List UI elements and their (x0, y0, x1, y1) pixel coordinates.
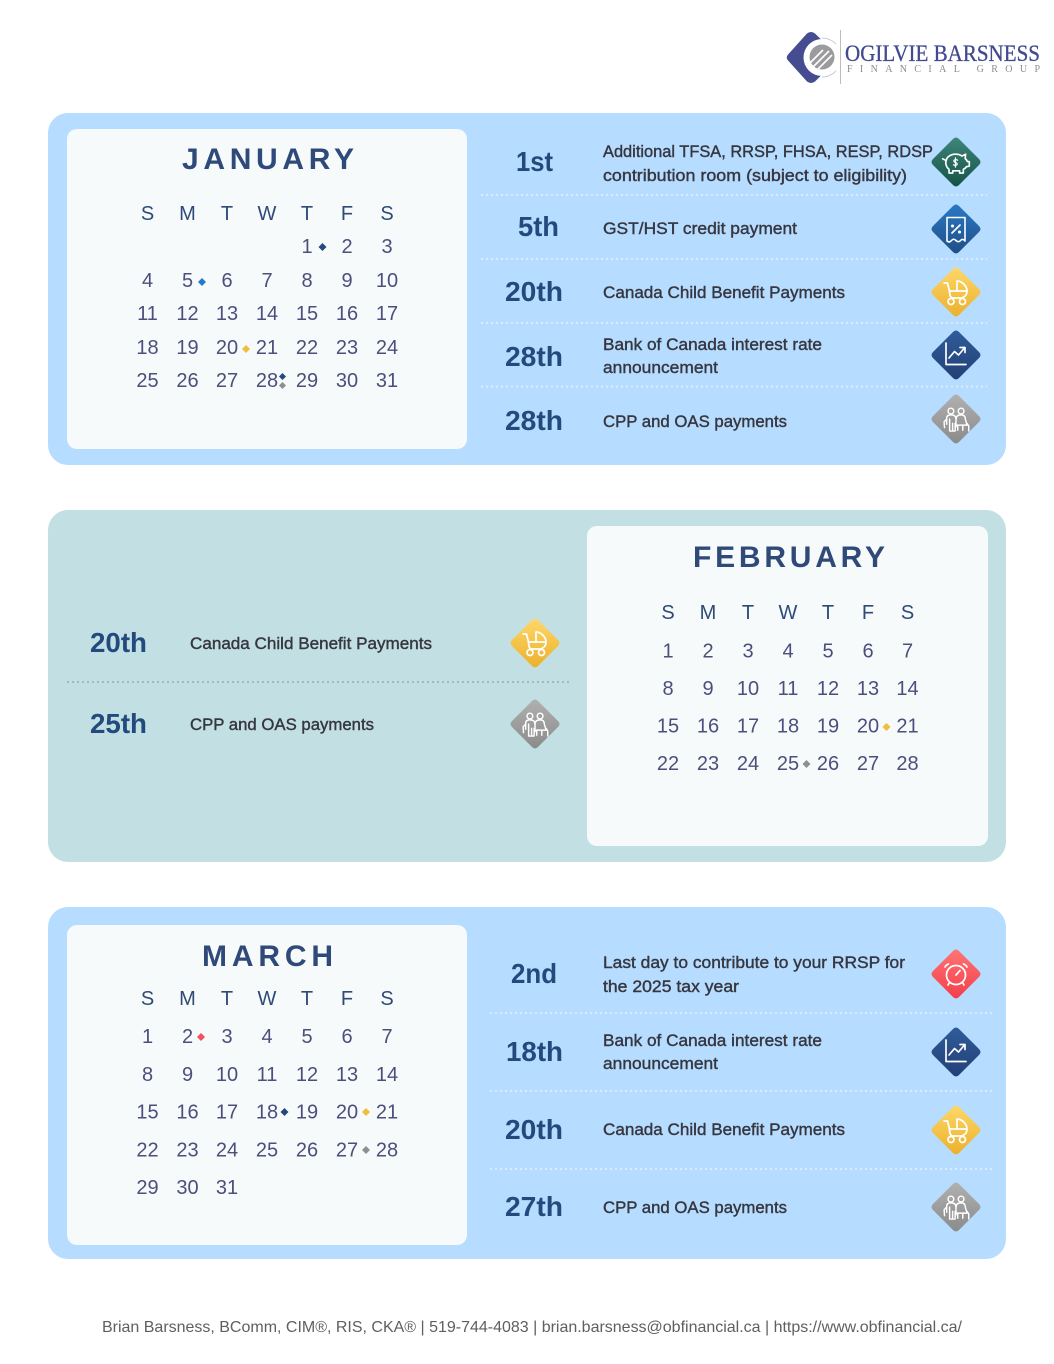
event: 5th: 5th (518, 211, 559, 242)
january dates: 8 (301, 270, 313, 292)
march dates: 21 (376, 1102, 398, 1124)
january dates: 5 (182, 270, 193, 292)
march dates (136, 1026, 398, 1199)
january weekday header (141, 203, 394, 225)
february dates: 12 (817, 678, 839, 700)
january weekday header: W (258, 203, 277, 225)
january dates: 12 (176, 303, 199, 325)
january dates: 1 (301, 236, 313, 258)
heading: february: FEBRUARY (693, 541, 885, 574)
february dates: 9 (702, 678, 714, 700)
march dates: 19 (296, 1102, 318, 1124)
event: february 20th (90, 618, 560, 668)
event: 1st: Additional TFSA, RRSP, FHSA, RESP, RDSP (603, 142, 933, 161)
event: 1st: 1st (516, 146, 553, 177)
january dates: 26 (176, 370, 199, 392)
march dates: 26 (296, 1140, 318, 1162)
march dates: 28 (376, 1140, 398, 1162)
january weekday header: T (221, 203, 233, 225)
march dates: 17 (216, 1102, 238, 1124)
february weekday header: T (742, 602, 754, 624)
event: march 2nd: 2nd (511, 958, 557, 989)
february dates: 2 (702, 640, 714, 662)
event: 5th (518, 204, 980, 254)
march dates: 24 (216, 1140, 238, 1162)
february dates: 8 (662, 678, 674, 700)
event: 28th pension: CPP and OAS payments (603, 412, 787, 431)
january weekday header: T (301, 203, 313, 225)
january dates: 11 (137, 303, 158, 325)
february dates: 6 (862, 640, 874, 662)
january dates: 25 (136, 370, 159, 392)
february calendar card (587, 526, 988, 846)
march dates: 10 (216, 1064, 238, 1086)
event: 28th pension: 28th (505, 405, 563, 436)
february weekday header (661, 602, 914, 624)
january dates: 21 (256, 337, 278, 359)
january dates: 23 (336, 337, 358, 359)
february weekday header: S (661, 602, 675, 624)
icon: seniors (932, 1182, 980, 1232)
february dates: 10 (737, 678, 759, 700)
february dates: 13 (857, 678, 879, 700)
january weekday header: S (141, 203, 154, 225)
january dates: 30 (336, 370, 358, 392)
march weekday header: W (258, 988, 277, 1010)
event: 28th interest rate: announcement (603, 358, 718, 377)
logo: FINANCIAL GROUP (847, 64, 1040, 75)
icon: piggy bank (932, 138, 980, 186)
event: february 20th: 20th (90, 627, 147, 658)
january dates: 27 (216, 370, 238, 392)
january weekday header: F (341, 203, 353, 225)
march dates: 9 (182, 1064, 193, 1086)
january dates: 28 (256, 370, 278, 392)
march dates: 23 (176, 1140, 199, 1162)
february dates: 20 (857, 716, 879, 738)
icon: seniors (932, 394, 980, 444)
march dates: 3 (221, 1026, 233, 1048)
february dates: 1 (662, 640, 674, 662)
january dates: 19 (176, 337, 199, 359)
february dates: 19 (817, 716, 839, 738)
january dates: 16 (336, 303, 358, 325)
february dates: 15 (657, 716, 679, 738)
march dates: 16 (176, 1102, 199, 1124)
event: february 25th (90, 700, 560, 748)
event: march 27th: 27th (505, 1191, 563, 1222)
event: march 18th (506, 1028, 980, 1076)
february dates: 28 (896, 753, 919, 775)
february dates: 18 (777, 716, 799, 738)
event: march 27th (505, 1182, 980, 1232)
january weekday header: S (380, 203, 394, 225)
event: 20th (505, 268, 980, 316)
january dates: 29 (296, 370, 318, 392)
february date markers (802, 723, 890, 768)
event: march 18th: Bank of Canada interest rate (603, 1031, 822, 1050)
february dates: 5 (822, 640, 834, 662)
march dates: 13 (336, 1064, 358, 1086)
panel: march (48, 907, 1006, 1259)
event: 28th interest rate: Bank of Canada interest rate (603, 335, 822, 354)
february dates: 27 (857, 753, 879, 775)
march weekday header (141, 988, 394, 1010)
icon: stroller (932, 1106, 980, 1154)
event: march 20th (505, 1106, 980, 1154)
january dates: 17 (376, 303, 398, 325)
march dates: 6 (341, 1026, 353, 1048)
january dates: 4 (142, 270, 153, 292)
february dates (657, 640, 919, 775)
march dates: 8 (142, 1064, 153, 1086)
logo (787, 30, 1040, 84)
january dates: 20 (216, 337, 238, 359)
event: 28th pension (505, 394, 980, 444)
march dates: 11 (257, 1064, 277, 1086)
march dates: 18 (256, 1102, 278, 1124)
icon: stroller (510, 618, 560, 668)
february dates: 26 (817, 753, 839, 775)
february weekday header: T (822, 602, 834, 624)
march dates: 12 (296, 1064, 318, 1086)
march dates: 22 (136, 1140, 159, 1162)
event: february 25th: 25th (90, 708, 147, 739)
january dates: 7 (261, 270, 273, 292)
january dates: 13 (216, 303, 238, 325)
february dates: 11 (778, 678, 798, 700)
march weekday header: T (301, 988, 313, 1010)
heading: march: MARCH (202, 940, 333, 973)
february dates: 4 (782, 640, 794, 662)
event: march 20th: 20th (505, 1114, 563, 1145)
february weekday header: S (901, 602, 914, 624)
march dates: 7 (381, 1026, 393, 1048)
heading: january: JANUARY (182, 143, 354, 176)
february dates: 22 (657, 753, 679, 775)
event: march 18th: announcement (603, 1054, 718, 1073)
march date markers (197, 1033, 370, 1154)
march dates: 15 (136, 1102, 159, 1124)
january calendar card (67, 129, 467, 449)
event: march 27th: CPP and OAS payments (603, 1198, 787, 1217)
event: march 2nd: Last day to contribute to your RRSP for (603, 953, 905, 972)
march dates: 4 (261, 1026, 273, 1048)
march dates: 29 (136, 1177, 159, 1199)
march dates: 14 (376, 1064, 398, 1086)
panel: january (48, 113, 1006, 465)
event: 28th interest rate (505, 330, 980, 380)
footer contact line: Brian Barsness, BComm, CIM®, RIS, CKA® | 519-744-4083 | brian.barsness@obfinancial.ca | https://www.obfinancial.ca/ (102, 1319, 963, 1336)
logo: OGILVIE BARSNESS (845, 41, 1040, 66)
icon: alarm clock (932, 950, 980, 998)
february dates: 3 (742, 640, 754, 662)
panel: february (48, 510, 1006, 862)
event: 20th: 20th (505, 276, 563, 307)
event: february 25th: CPP and OAS payments (190, 715, 374, 734)
january dates (136, 236, 398, 392)
january dates: 10 (376, 270, 398, 292)
march weekday header: M (179, 988, 196, 1010)
march calendar card (67, 925, 467, 1245)
event: 1st: contribution room (subject to eligibility) (603, 166, 907, 185)
february dates: 21 (896, 716, 919, 738)
january date markers (198, 243, 326, 389)
march dates: 31 (216, 1177, 238, 1199)
march dates: 25 (256, 1140, 278, 1162)
event: 5th: GST/HST credit payment (603, 219, 797, 238)
icon: seniors (510, 700, 560, 748)
january dates: 2 (341, 236, 353, 258)
icon: receipt (932, 204, 980, 254)
january dates: 18 (136, 337, 159, 359)
march dates: 27 (336, 1140, 358, 1162)
february dates: 25 (777, 753, 799, 775)
march dates: 20 (336, 1102, 358, 1124)
event: march 18th: 18th (506, 1036, 563, 1067)
february dates: 16 (697, 716, 719, 738)
event: february 20th: Canada Child Benefit Payments (190, 634, 432, 653)
march weekday header: T (221, 988, 233, 1010)
january dates: 24 (376, 337, 398, 359)
january dates: 9 (341, 270, 353, 292)
january dates: 22 (296, 337, 318, 359)
march weekday header: S (141, 988, 154, 1010)
march dates: 2 (182, 1026, 193, 1048)
march dates: 5 (301, 1026, 313, 1048)
icon: stroller (932, 268, 980, 316)
february dates: 24 (737, 753, 759, 775)
icon: chart (932, 1028, 980, 1076)
february dates: 17 (737, 716, 759, 738)
february weekday header: W (779, 602, 798, 624)
january dates: 6 (221, 270, 233, 292)
january weekday header: M (179, 203, 196, 225)
event: march 20th: Canada Child Benefit Payments (603, 1120, 845, 1139)
icon: chart (932, 330, 980, 380)
february weekday header: F (862, 602, 874, 624)
january dates: 15 (296, 303, 318, 325)
february weekday header: M (700, 602, 716, 624)
event: 28th interest rate: 28th (505, 341, 563, 372)
january dates: 31 (376, 370, 398, 392)
march weekday header: F (341, 988, 353, 1010)
event: march 2nd (511, 950, 980, 998)
event: 1st (516, 138, 980, 186)
february dates: 7 (902, 640, 913, 662)
event: 20th: Canada Child Benefit Payments (603, 283, 845, 302)
march dates: 30 (176, 1177, 199, 1199)
february dates: 14 (896, 678, 919, 700)
january dates: 14 (256, 303, 278, 325)
event: march 2nd: the 2025 tax year (603, 977, 739, 996)
march weekday header: S (380, 988, 394, 1010)
february dates: 23 (697, 753, 719, 775)
january dates: 3 (381, 236, 393, 258)
march dates: 1 (142, 1026, 153, 1048)
